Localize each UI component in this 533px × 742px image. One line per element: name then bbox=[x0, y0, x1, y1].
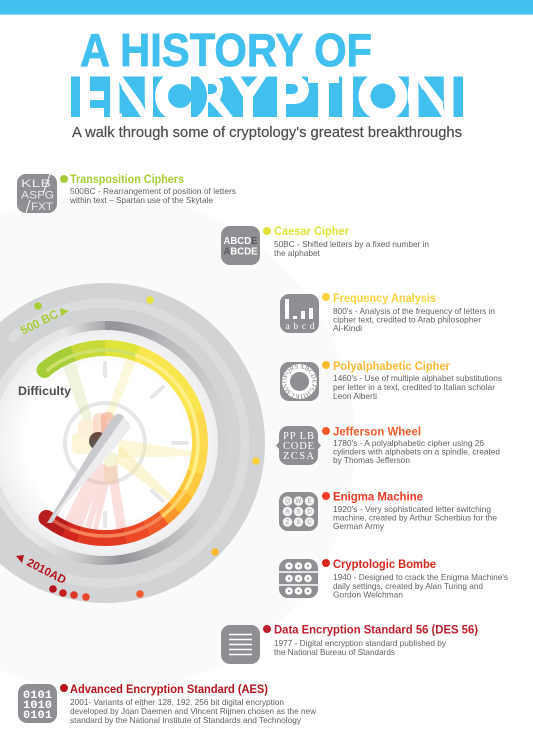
description: 1460's - Use of multiple alphabet substitutions bbox=[333, 374, 502, 383]
icon: cipher disc: ABCDEFGHIJKLMNOPQRSTUVWXYZ bbox=[282, 364, 317, 399]
title: A HISTORY OF: A HISTORY OF bbox=[80, 24, 372, 76]
label: 2010AD: 2010AD bbox=[25, 557, 68, 587]
icon: keyboard: Q bbox=[285, 499, 290, 505]
description: 2001- Variants of either 128, 192, 256 bit digital encryption bbox=[70, 698, 284, 707]
hub bbox=[89, 432, 107, 450]
heading: Advanced Encryption Standard (AES) bbox=[70, 682, 268, 696]
description: standard by the National Institute of Standards and Technology bbox=[70, 716, 302, 725]
heading: Jefferson Wheel bbox=[333, 424, 421, 438]
description: German Army bbox=[333, 522, 385, 531]
difficulty beams bbox=[62, 358, 193, 533]
title: ENCRYPTION knockout band bbox=[71, 76, 463, 117]
bullet bbox=[60, 175, 68, 183]
description: per letter in a text, credited to Italian scholar bbox=[333, 383, 495, 392]
icon: caesar: ABCDE bbox=[224, 235, 258, 247]
title: ENCRYPTION knockout band: ENCRYPTION bbox=[75, 54, 459, 139]
panel: Cryptologic Bombe bbox=[279, 557, 508, 600]
description bbox=[274, 240, 429, 258]
description bbox=[274, 639, 447, 657]
label: 500 BC: 500 BC bbox=[18, 307, 61, 338]
heading: Enigma Machine bbox=[333, 490, 423, 504]
description bbox=[333, 439, 500, 465]
panel: Transposition Ciphers bbox=[17, 172, 236, 213]
description: Leon Alberti bbox=[333, 392, 377, 401]
bullet bbox=[263, 227, 271, 235]
icon: keyboard: Z bbox=[286, 520, 290, 526]
bullet bbox=[322, 293, 330, 301]
panel: DES 56 bbox=[221, 622, 478, 664]
panel: Enigma Machine bbox=[279, 490, 497, 531]
bullet bbox=[322, 427, 330, 435]
panel: Frequency Analysis bbox=[280, 291, 495, 333]
subtitle: A walk through some of cryptology's greatest breakthroughs bbox=[72, 125, 462, 141]
icon: caesar: ABCDE bbox=[224, 246, 258, 258]
heading: Data Encryption Standard 56 (DES 56) bbox=[274, 622, 478, 636]
needle bbox=[47, 414, 130, 523]
description: 500BC - Rearrangement of position of letters bbox=[70, 187, 236, 196]
description: 1780's - A polyalphabetic cipher using 26 bbox=[333, 439, 484, 448]
panel: AES bbox=[18, 682, 316, 725]
description bbox=[70, 698, 316, 725]
icon: frequency bars: abcd bbox=[286, 322, 315, 332]
description: Gordon Welchman bbox=[333, 590, 403, 600]
icon: keyboard: S bbox=[296, 510, 301, 516]
bullet bbox=[263, 625, 271, 633]
icon: keyboard: W bbox=[296, 499, 302, 505]
icon: keyboard: C bbox=[307, 520, 312, 526]
arrow: 2010AD bbox=[16, 555, 24, 563]
heading: Polyalphabetic Cipher bbox=[333, 359, 450, 373]
icon: keyboard: X bbox=[296, 520, 301, 526]
icon: text lines bbox=[221, 625, 260, 664]
description: by Thomas Jefferson bbox=[333, 456, 410, 465]
icon: wheel bbox=[276, 426, 321, 465]
description bbox=[333, 573, 508, 600]
dial bbox=[0, 283, 265, 603]
heading: Transposition Ciphers bbox=[70, 172, 184, 186]
icon: wheel: PP LB bbox=[283, 431, 314, 442]
clock ticks bbox=[105, 363, 187, 526]
inner white disc bbox=[0, 330, 218, 556]
label: Difficulty: Difficulty bbox=[18, 384, 71, 398]
heading: Cryptologic Bombe bbox=[333, 557, 436, 571]
description bbox=[333, 307, 495, 333]
heading: Caesar Cipher bbox=[274, 224, 349, 238]
bullet bbox=[322, 361, 330, 369]
icon: bombe bbox=[279, 559, 318, 598]
panel: Jefferson Wheel bbox=[276, 424, 500, 465]
panel: Polyalphabetic Cipher bbox=[280, 359, 502, 401]
description: 1977 - Digital encryption standard published by bbox=[274, 639, 447, 648]
icon: binary: 0101 bbox=[23, 690, 52, 702]
panel: Caesar Cipher bbox=[221, 224, 429, 265]
description bbox=[69, 187, 236, 205]
description: cipher text, credited to Arab philosopher bbox=[333, 316, 481, 324]
description: 1920's - Very sophisticated letter switching bbox=[333, 505, 491, 514]
icon: transposition: FXT bbox=[31, 201, 53, 213]
icon: keyboard bbox=[279, 492, 318, 531]
description: daily settings, created by Alan Turing and bbox=[333, 582, 483, 591]
description: 1940 - Designed to crack the Enigma Machine's bbox=[333, 573, 508, 582]
arrow: 500 BC bbox=[60, 308, 69, 316]
inner ring bbox=[65, 403, 145, 483]
description bbox=[333, 505, 497, 531]
icon: keyboard: A bbox=[285, 510, 290, 516]
description: the alphabet bbox=[274, 249, 321, 258]
icon: keyboard: E bbox=[307, 499, 312, 505]
icon: caesar bbox=[221, 226, 260, 265]
icon: binary: 1010 bbox=[23, 700, 52, 712]
heading: Frequency Analysis bbox=[333, 291, 436, 305]
icon: frequency bars bbox=[280, 294, 319, 333]
description: 800's - Analysis of the frequency of letters in bbox=[333, 307, 495, 316]
timeline dots bbox=[34, 296, 260, 601]
description: the National Bureau of Standards bbox=[274, 648, 395, 657]
bullet bbox=[322, 559, 330, 567]
icon: binary: 0101 bbox=[23, 710, 52, 722]
bullet bbox=[322, 492, 330, 500]
description: developed by Joan Daemen and Vincent Rijmen chosen as the new bbox=[70, 707, 316, 716]
difficulty arc bbox=[0, 309, 239, 577]
icon: wheel: CODE bbox=[283, 441, 314, 452]
icon: binary bbox=[18, 684, 57, 723]
description: Al-Kindi bbox=[333, 324, 362, 333]
icon: transposition: ASFG bbox=[21, 190, 54, 202]
description: within text – Spartan use of the Skytale bbox=[69, 196, 213, 205]
description: 50BC - Shifted letters by a fixed number in bbox=[274, 240, 429, 249]
icon: keyboard: D bbox=[307, 510, 312, 516]
description bbox=[333, 374, 502, 401]
icon: transposition: KLB bbox=[21, 178, 51, 190]
description: machine, created by Arthur Scherbius for the bbox=[333, 514, 497, 522]
icon: wheel: ZCSA bbox=[283, 451, 314, 462]
bullet bbox=[60, 684, 68, 692]
icon: transposition bbox=[17, 174, 57, 213]
top bar bbox=[0, 0, 533, 15]
description: cylinders with alphabets on a spindle, created bbox=[333, 448, 500, 456]
